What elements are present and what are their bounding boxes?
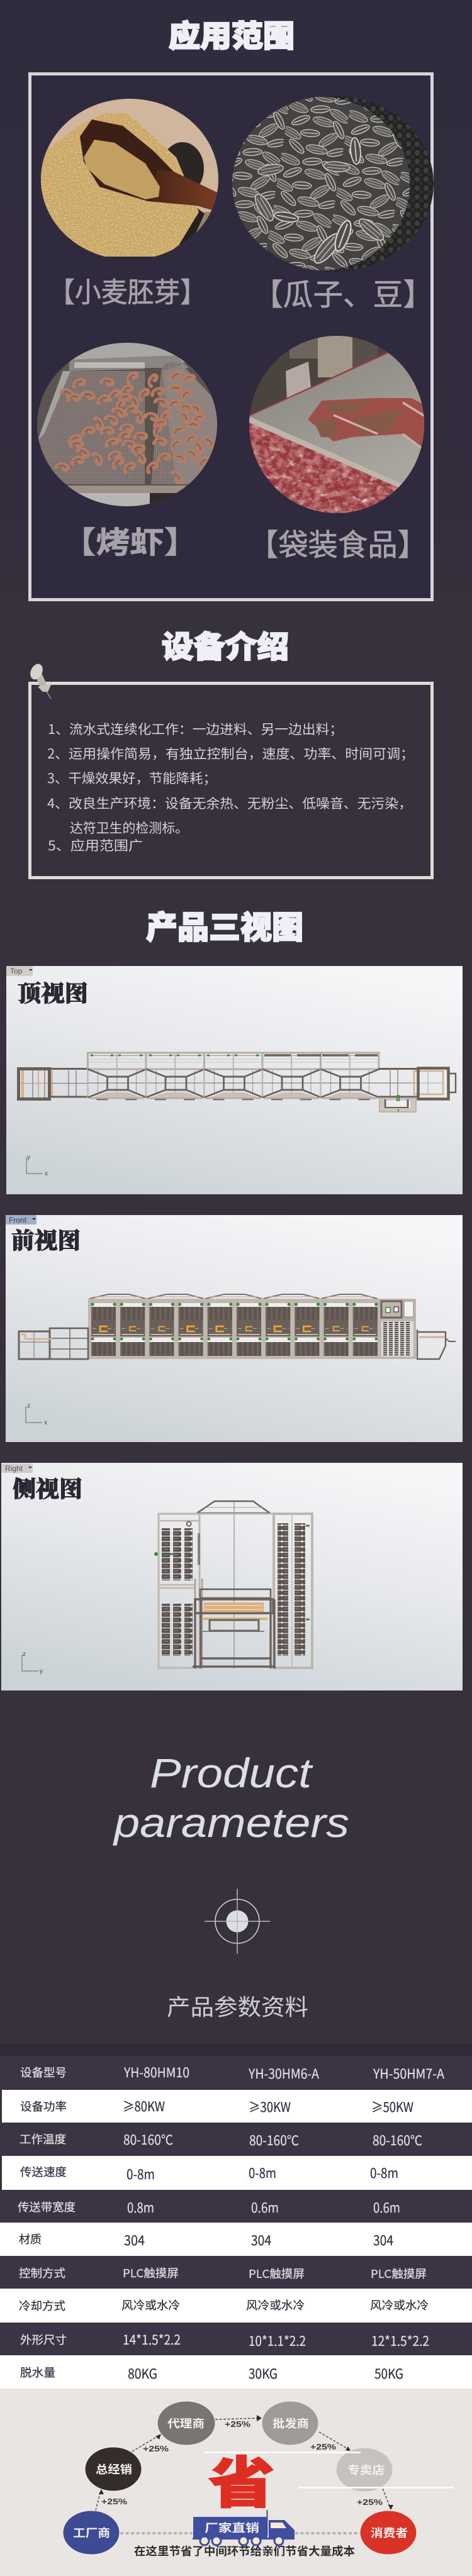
row: cooling: 风冷或水冷 — [246, 2297, 305, 2313]
labels: +25% markups: +25% — [310, 2442, 337, 2451]
row: belt width — [0, 2190, 472, 2223]
row: control: 控制方式 — [19, 2265, 65, 2281]
arrows: distribution chain — [96, 2418, 390, 2511]
axis: y z — [22, 1651, 43, 1675]
white strike lines — [205, 2453, 454, 2488]
node: factory — [63, 2511, 120, 2555]
row: model — [0, 2056, 472, 2090]
row: belt width: 0.6m — [373, 2198, 400, 2217]
row: dehydration: 脱水量 — [20, 2364, 55, 2380]
tab: Right — [1, 1463, 33, 1473]
big character: save: 省 — [208, 2439, 275, 2519]
row: dehydration: 50KG — [374, 2364, 403, 2383]
label: packaged food: 【袋装食品】 — [249, 520, 427, 564]
title: equipment introduction: 设备介绍 — [162, 622, 289, 666]
row: power — [2, 2090, 472, 2123]
text: feature list: 3、干燥效果好，节能降耗； — [47, 769, 216, 787]
text: feature list: 2、运用操作简易，有独立控制台，速度、功率、时间可调； — [47, 744, 414, 763]
text: feature list: 1、流水式连续化工作：一边进料、另一边出料； — [48, 719, 343, 738]
row: model: YH-80HM10 — [123, 2063, 189, 2082]
row: material — [0, 2223, 472, 2256]
icon: truck — [193, 2510, 295, 2545]
tab: Right: Right — [5, 1464, 23, 1473]
text: feature list: 5、应用范围广 — [48, 836, 143, 855]
axis: y z: z — [23, 1651, 26, 1658]
row: model: YH-30HM6-A — [248, 2064, 319, 2083]
node: factory: 工厂商 — [73, 2524, 110, 2541]
diagram: top view machine — [19, 1053, 456, 1112]
tab: Top — [6, 966, 33, 976]
row: model: YH-50HM7-A — [373, 2064, 444, 2083]
title: application range: 应用范围 — [169, 11, 295, 55]
row: dimensions: 外形尺寸 — [20, 2331, 67, 2348]
panel: top view — [6, 966, 463, 1194]
row: dehydration: 30KG — [249, 2364, 278, 2383]
panel: factory direct savings — [0, 2389, 472, 2576]
photo: sunflower seeds and black beans — [230, 94, 437, 274]
row: power: 设备功率 — [20, 2098, 67, 2114]
photo: roasted shrimp on mesh belt — [35, 340, 220, 509]
section: application range — [30, 11, 437, 600]
row: material: 304 — [124, 2231, 145, 2250]
dashed link line — [120, 2532, 360, 2534]
labels: +25% markups: +25% — [357, 2497, 383, 2507]
top section background — [0, 0, 472, 604]
tab: Front — [6, 1215, 37, 1224]
row: cooling: 冷却方式 — [19, 2297, 65, 2314]
arrowheads — [99, 2415, 393, 2510]
label: roasted shrimp: 【烤虾】 — [62, 518, 198, 562]
node: consumer — [360, 2511, 417, 2555]
tab: Front: Front — [9, 1216, 27, 1224]
node: wholesaler — [262, 2401, 318, 2445]
row: temperature: 80-160℃ — [373, 2131, 422, 2150]
panel: front view — [6, 1215, 463, 1442]
label: wheat germ: 【小麦胚芽】 — [48, 270, 206, 310]
row: material: 304 — [251, 2231, 271, 2250]
section: equipment introduction — [28, 622, 432, 948]
row: temperature: 80-160℃ — [123, 2130, 173, 2149]
panel frame: application range — [30, 74, 432, 600]
axis: x z — [26, 1402, 47, 1426]
row: power: ≥80KW — [123, 2097, 165, 2116]
node: specialty store: 专卖店 — [347, 2462, 385, 2478]
axis: x y: y — [27, 1154, 30, 1161]
heading: Product parameters — [113, 1750, 349, 1846]
panel frame: equipment introduction — [30, 683, 432, 878]
diagram: side view machine — [154, 1501, 312, 1668]
row: dimensions: 14*1.5*2.2 — [123, 2330, 181, 2349]
icon: crosshair — [205, 1889, 270, 1954]
heading: Product parameters: parameters — [113, 1799, 349, 1846]
row: model: 设备型号 — [20, 2064, 67, 2080]
labels: +25% markups: +25% — [225, 2419, 251, 2429]
diagram: front view machine — [19, 1294, 456, 1359]
row: dimensions: 12*1.5*2.2 — [371, 2331, 429, 2350]
labels: +25% markups: +25% — [101, 2497, 128, 2506]
axis: x y: x — [45, 1170, 48, 1177]
labels: +25% markups: +25% — [143, 2444, 169, 2453]
node: consumer: 消费者 — [371, 2524, 408, 2541]
row: belt width: 传送带宽度 — [18, 2199, 76, 2215]
axis: y z: y — [40, 1668, 43, 1675]
row: material: 材质 — [19, 2231, 42, 2247]
row: power: ≥50KW — [371, 2097, 413, 2116]
row: dimensions: 10*1.1*2.2 — [249, 2331, 306, 2350]
row: belt speed: 0-8m — [126, 2165, 155, 2184]
node: agent — [157, 2401, 215, 2445]
row: cooling: 风冷或水冷 — [121, 2297, 180, 2313]
row: control — [0, 2256, 472, 2289]
heading: side view: 侧视图 — [13, 1472, 82, 1504]
row: dimensions — [0, 2323, 472, 2355]
node: agent: 代理商 — [167, 2415, 205, 2431]
row: control: PLC触摸屏 — [123, 2265, 179, 2281]
row: control: PLC触摸屏 — [371, 2265, 427, 2282]
text: feature list — [47, 719, 414, 855]
node: general distributor — [85, 2447, 142, 2491]
row: belt speed — [2, 2156, 472, 2190]
row: belt speed: 0-8m — [249, 2163, 276, 2182]
row: dehydration: 80KG — [128, 2364, 157, 2383]
photo: wheat germ — [38, 94, 220, 261]
axis: x z: z — [27, 1402, 30, 1409]
row: power: ≥30KW — [249, 2097, 291, 2116]
node: general distributor: 总经销 — [96, 2461, 132, 2477]
axis: x y — [26, 1154, 48, 1177]
subtitle: product data: 产品参数资料 — [167, 1989, 308, 2022]
tab: Top: Top — [10, 967, 23, 975]
heading: front view: 前视图 — [11, 1223, 81, 1255]
row: temperature — [0, 2123, 472, 2156]
row: control: PLC触摸屏 — [249, 2265, 305, 2282]
heading: Product parameters: Product — [150, 1750, 313, 1796]
row: cooling — [0, 2289, 472, 2323]
panel: side view — [1, 1463, 463, 1690]
row: material: 304 — [373, 2231, 393, 2250]
heading: top view: 顶视图 — [18, 976, 88, 1008]
row: dehydration — [0, 2355, 472, 2389]
node: specialty store — [336, 2448, 393, 2492]
row: temperature: 工作温度 — [20, 2131, 66, 2147]
row: cooling: 风冷或水冷 — [370, 2297, 429, 2313]
row: belt width: 0.6m — [251, 2198, 279, 2217]
labels: +25% markups — [101, 2419, 383, 2507]
label: seeds and beans: 【瓜子、豆】 — [253, 270, 433, 314]
caption: savings note: 在这里节省了中间环节给亲们节省大量成本 — [134, 2543, 355, 2559]
text: feature list: 达符卫生的检测标。 — [70, 818, 188, 837]
icon: truck: 厂家直销 — [205, 2519, 259, 2536]
row: belt width: 0.8m — [127, 2198, 154, 2217]
axis: x z: x — [44, 1419, 47, 1426]
node: wholesaler: 批发商 — [273, 2415, 309, 2431]
icon: push pin — [28, 662, 52, 699]
photo: packaged food on steel tray — [245, 333, 428, 516]
row: belt speed: 传送速度 — [20, 2163, 67, 2180]
title: three views: 产品三视图 — [146, 902, 303, 948]
row: temperature: 80-160℃ — [249, 2131, 299, 2150]
text: feature list: 4、改良生产环境：设备无余热、无粉尘、低噪音、无污染， — [47, 794, 412, 813]
row: belt speed: 0-8m — [370, 2163, 398, 2182]
table: product parameters — [0, 2044, 472, 2389]
